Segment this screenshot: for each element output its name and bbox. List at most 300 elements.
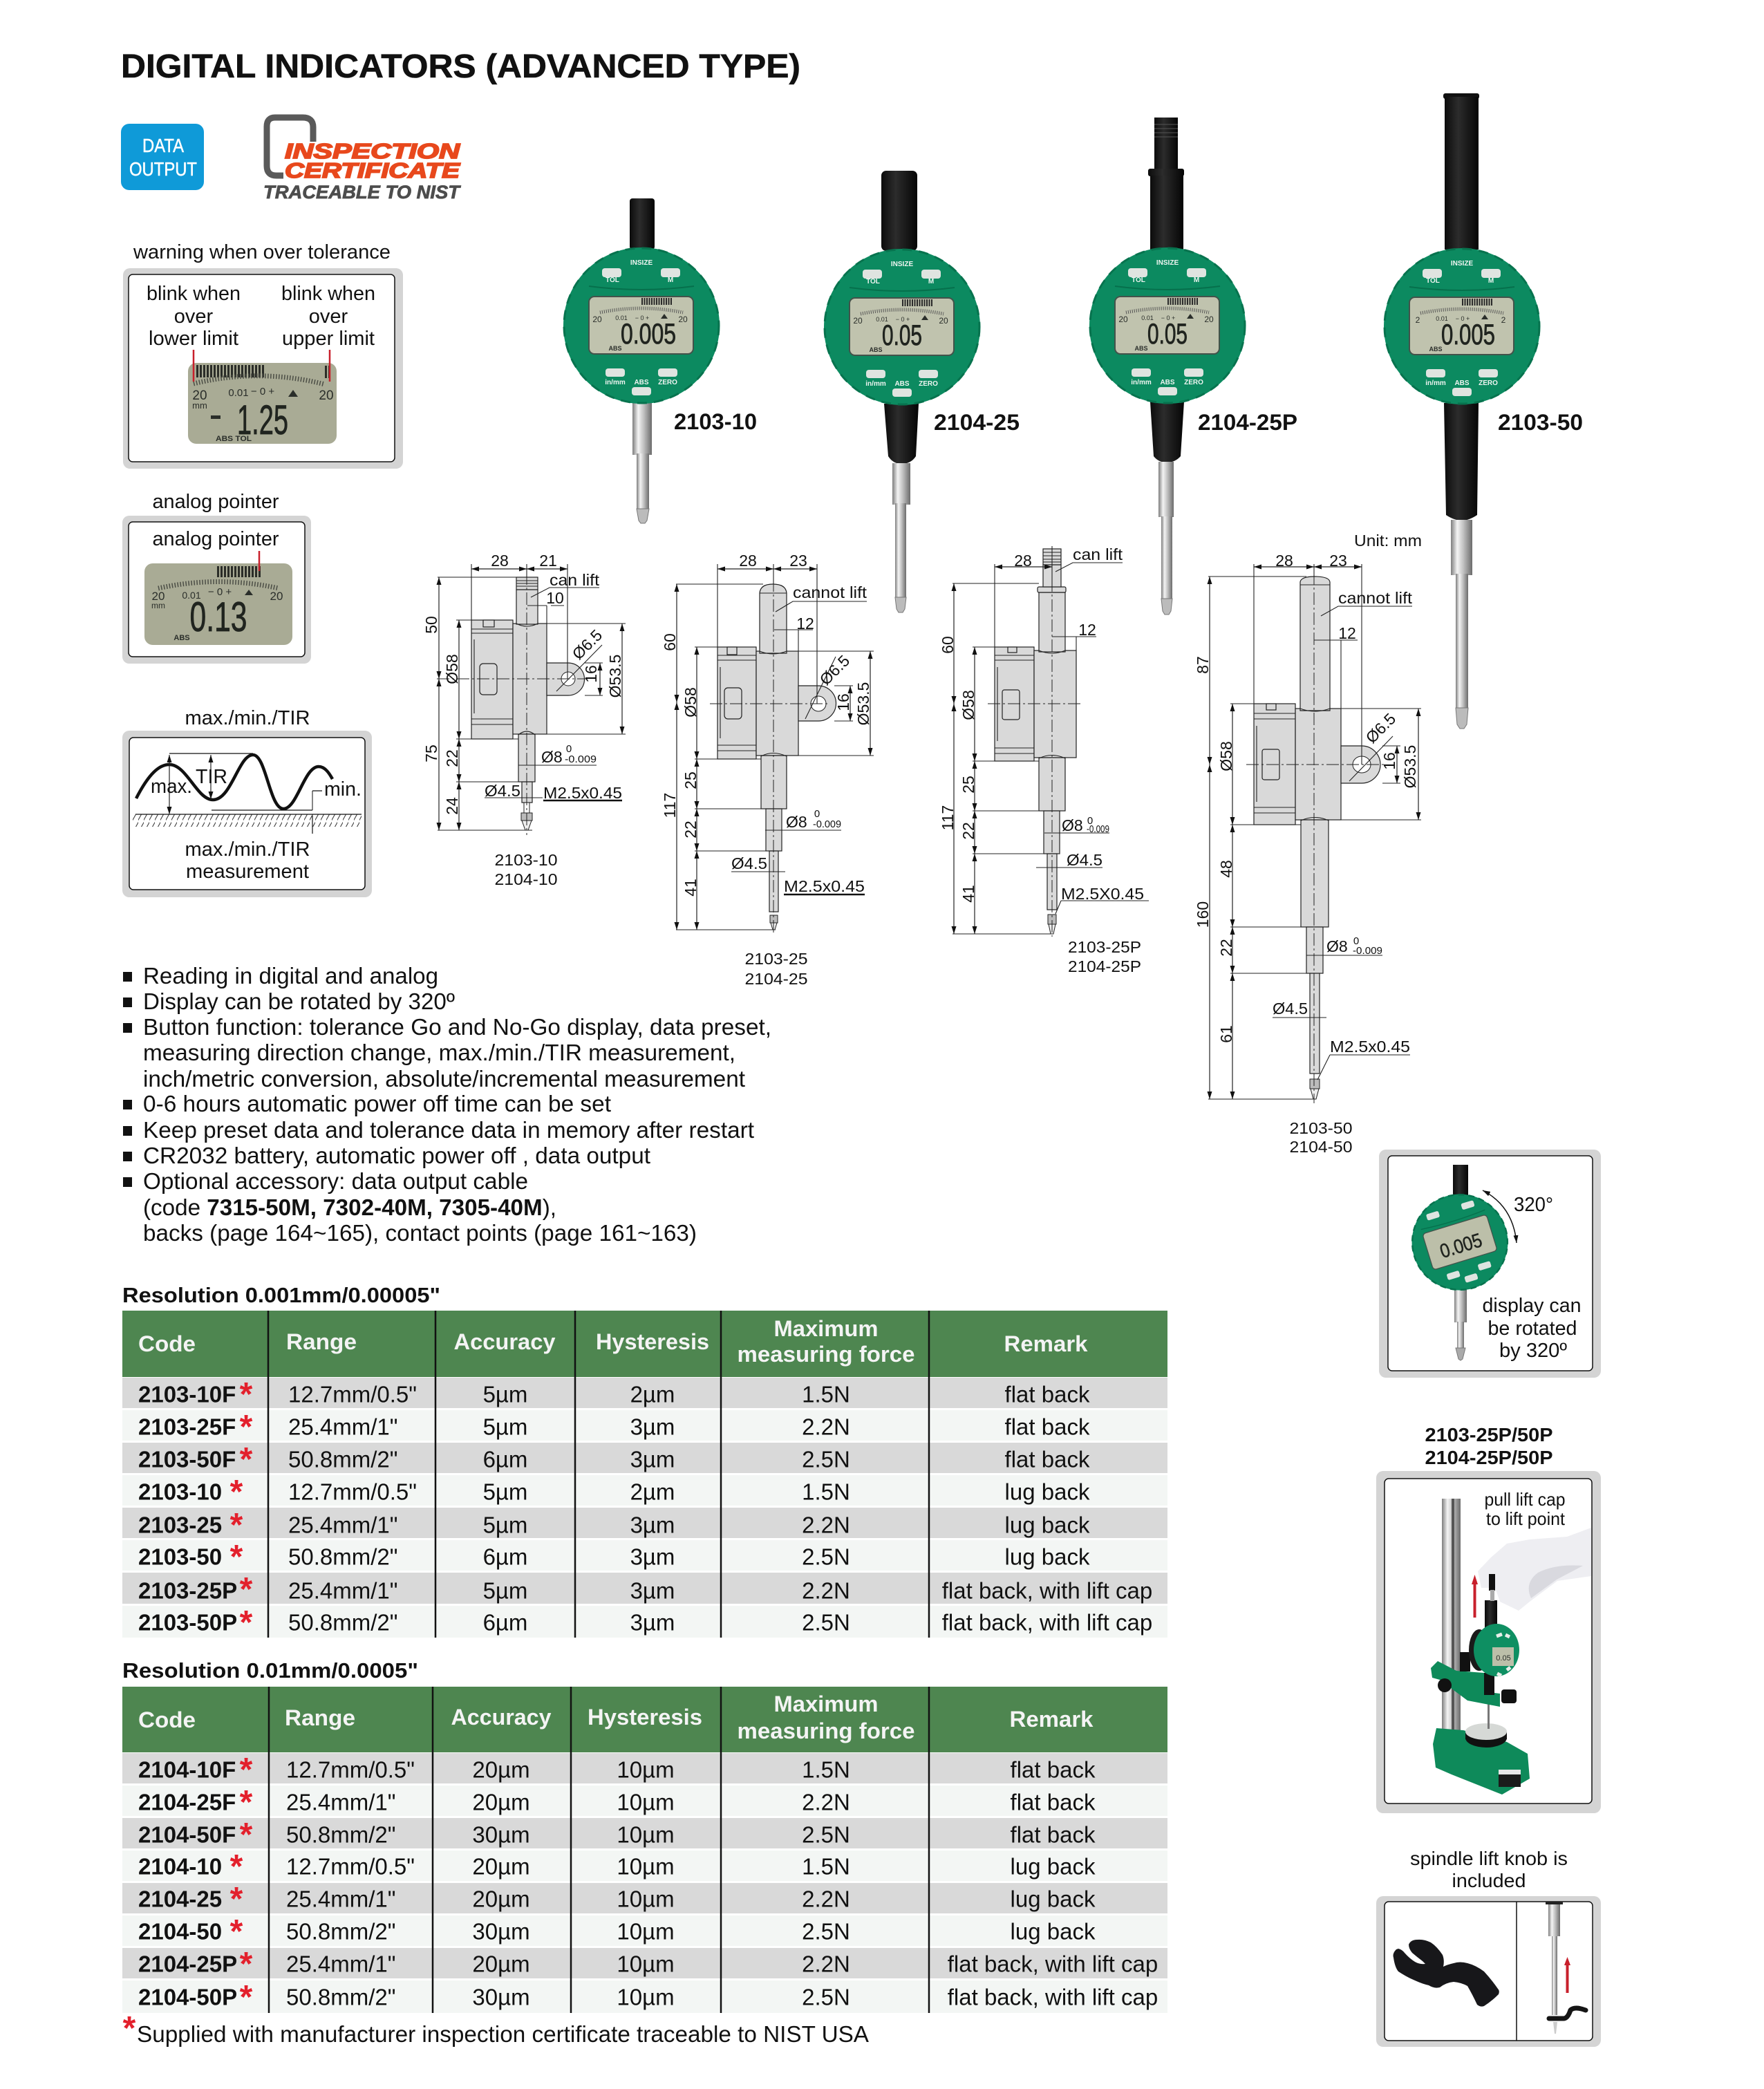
product photo: 2103-10: ABS — [634, 379, 649, 386]
table heading: resolution 0.001: Resolution 0.001mm/0.00005" — [122, 1283, 440, 1307]
text: analog pointer: analog pointer — [152, 528, 279, 550]
dimension labels: Ø53.5 — [854, 682, 872, 725]
row: 2104-50P: * — [240, 1979, 253, 2016]
dimension labels: Ø4.5 — [1067, 851, 1102, 869]
row: 2104-25: lug back — [1011, 1886, 1096, 1912]
row: 2103-10F: 2µm — [630, 1381, 675, 1407]
row: 2104-10F: 12.7mm/0.5" — [286, 1757, 415, 1782]
dimension labels: can lift — [1073, 545, 1123, 563]
row: 2104-25F — [122, 1784, 1167, 1821]
dimensions — [953, 546, 1149, 937]
product photo: 2103-10: TOL — [606, 277, 619, 284]
product photo: 2103-10: − 0 + — [635, 315, 649, 321]
dimension labels: cannot lift — [793, 583, 867, 601]
panel: analog pointer — [122, 516, 311, 664]
row: 2104-50: lug back — [1011, 1919, 1096, 1944]
icon: rotated indicator: 0.005 — [1437, 1229, 1485, 1263]
product photo: 2104-25 — [824, 171, 1020, 612]
product photo: 2104-25P: ABS — [1134, 345, 1148, 352]
dimension labels — [661, 552, 872, 897]
dimension labels: 25 — [682, 771, 700, 789]
technical drawing: 2103-25P — [939, 545, 1149, 975]
dimension labels: 50 — [422, 616, 440, 634]
heading: spindle lift knob: spindle lift knob is — [1410, 1848, 1568, 1869]
logo: inspection certificate — [263, 118, 462, 203]
body outline — [471, 577, 584, 830]
dimension labels — [939, 545, 1144, 903]
dimension labels: 0 — [814, 808, 820, 820]
panel: pull lift cap — [1376, 1471, 1601, 1813]
row: 2103-50P: 6µm — [483, 1609, 527, 1636]
row: 2104-25P: 2.2N — [802, 1951, 850, 1977]
lcd display: 0.13: 20 — [270, 590, 283, 603]
chart: measurement wave: min. — [324, 778, 362, 800]
product photo: 2103-50: ZERO — [1479, 380, 1498, 387]
row: 2103-25F: 3µm — [630, 1414, 675, 1439]
text: blink upper limit — [281, 283, 375, 350]
feature list: Display can be rotated by 320º — [143, 989, 455, 1014]
heading: lift cap models: 2103-25P/50P — [1425, 1424, 1552, 1445]
product photo: 2103-10: 20 — [592, 315, 602, 324]
row: 2103-10F: 1.5N — [802, 1381, 850, 1407]
logo: inspection certificate: INSPECTION — [285, 139, 460, 163]
product photo: 2103-10: ABS — [608, 345, 622, 352]
product photo: 2104-25P: in/mm — [1131, 379, 1152, 386]
dimension labels: 22 — [959, 822, 977, 840]
dimension labels: M2.5X0.45 — [1061, 885, 1144, 903]
heading: spindle lift knob: included — [1452, 1870, 1526, 1891]
product photo: 2103-50: 2 — [1416, 315, 1420, 325]
feature list: (code 7315-50M, 7302-40M, 7305-40M), — [143, 1195, 556, 1220]
row: 2103-10: 5µm — [483, 1479, 527, 1504]
model labels: 2103-10 — [495, 851, 557, 869]
heading: lift cap models: 2104-25P/50P — [1425, 1447, 1552, 1468]
chart: measurement wave: TIR — [196, 766, 227, 788]
row: 2104-25 — [122, 1881, 1167, 1918]
text: blink lower limit: lower limit — [149, 328, 238, 350]
dimension labels: 41 — [682, 879, 700, 897]
row: 2103-50F: 2103-50F — [138, 1446, 236, 1472]
product photo: 2104-25P: 2104-25P — [1198, 410, 1297, 435]
row: 2104-50P: 2.5N — [802, 1984, 850, 2010]
product photo: 2104-25P: − 0 + — [1161, 315, 1175, 321]
product photo: 2103-10: 0.01 — [615, 315, 628, 321]
product photo: 2104-25: ABS — [894, 380, 910, 388]
row: 2104-50F: 2104-50F — [138, 1822, 236, 1847]
dimension labels: M2.5x0.45 — [784, 877, 865, 895]
unit note: Unit: mm — [1354, 532, 1422, 550]
dimension labels: Ø53.5 — [606, 655, 624, 697]
text: display can be rotated — [1482, 1295, 1582, 1362]
row: 2104-50P — [122, 1979, 1167, 2016]
dimension labels: 28 — [491, 552, 509, 570]
dimensions — [1208, 564, 1421, 1103]
heading: warning when over tolerance: warning when over tolerance — [133, 241, 391, 263]
dimension labels: Ø6.5 — [816, 652, 853, 688]
dimension labels: 25 — [959, 776, 977, 794]
table header — [122, 1687, 1167, 1752]
text: blink lower limit — [147, 283, 241, 350]
row: 2103-50P: 2.5N — [802, 1609, 850, 1636]
product photo: 2104-25P: M — [1194, 277, 1199, 284]
product photo: 2103-10: INSIZE — [630, 259, 653, 267]
row: 2103-50P: 2103-50P — [138, 1609, 237, 1636]
dimension labels: 16 — [834, 693, 852, 711]
row: 2104-10: 20µm — [472, 1854, 530, 1879]
dimension labels: M2.5x0.45 — [1330, 1038, 1410, 1056]
dimension labels: -0.009 — [1353, 945, 1382, 957]
body outline — [995, 549, 1076, 934]
row: 2104-25: * — [230, 1881, 243, 1918]
row: 2103-25F: 25.4mm/1" — [288, 1414, 397, 1439]
text: blink upper limit: upper limit — [282, 328, 375, 350]
text: pull lift cap: to lift point — [1486, 1508, 1566, 1529]
row: 2104-50F: 30µm — [472, 1822, 530, 1847]
text: 320 degrees: 320° — [1514, 1194, 1553, 1216]
row: 2104-10F: 10µm — [617, 1757, 675, 1782]
table header: Range — [286, 1329, 357, 1354]
table header: measuring force — [737, 1718, 915, 1743]
row: 2104-50P: flat back, with lift cap — [948, 1984, 1158, 2010]
dimensions — [437, 564, 626, 835]
row: 2103-25: 25.4mm/1" — [288, 1512, 397, 1537]
row: 2104-50F: flat back — [1011, 1822, 1096, 1847]
dimension labels: cannot lift — [1338, 589, 1413, 607]
row: 2104-10: * — [230, 1848, 243, 1885]
row: 2104-25F: 25.4mm/1" — [286, 1789, 395, 1815]
product photo: 2103-50: 2 — [1501, 315, 1506, 325]
product photo: 2104-25: INSIZE — [891, 261, 913, 268]
badge: data output: DATA — [142, 135, 184, 156]
row: 2104-25F: 20µm — [472, 1789, 530, 1815]
dimension labels: Ø4.5 — [485, 782, 520, 800]
dimension labels: -0.009 — [1087, 823, 1109, 835]
row: 2104-10: lug back — [1011, 1854, 1096, 1879]
row: 2103-10F: * — [240, 1376, 253, 1413]
lcd display: -1.25: mm — [192, 400, 207, 411]
feature list: Keep preset data and tolerance data in memory after restart — [143, 1117, 754, 1143]
product photo: 2104-25: 20 — [853, 316, 863, 326]
dimension labels: -0.009 — [813, 818, 841, 830]
dimension labels: 60 — [939, 636, 957, 654]
product photo: 2104-25: 20 — [939, 316, 948, 326]
product photo: 2103-10: ZERO — [658, 379, 677, 386]
feature list: Reading in digital and analog — [143, 963, 438, 989]
table header: Remark — [1004, 1331, 1088, 1356]
heading: lift cap models — [1425, 1424, 1552, 1468]
dimension labels: Ø8 — [1062, 816, 1083, 834]
arrow: red lift arrow — [1564, 1957, 1570, 1993]
row: 2103-50P: 50.8mm/2" — [288, 1609, 397, 1636]
product photo: 2103-10: M — [668, 277, 673, 284]
row: 2104-50P: 30µm — [472, 1984, 530, 2010]
row: 2103-25P — [122, 1571, 1167, 1608]
text: pull lift cap — [1485, 1489, 1566, 1529]
row: 2104-50: 2104-50 — [138, 1919, 222, 1944]
table header: Code — [138, 1331, 196, 1356]
dimension labels: 75 — [422, 744, 440, 762]
row: 2103-50F: 3µm — [630, 1446, 675, 1472]
row: 2104-25F: flat back — [1011, 1789, 1096, 1815]
model labels: 2104-10 — [495, 870, 557, 888]
row: 2104-25: 2104-25 — [138, 1886, 222, 1912]
row: 2104-10F — [122, 1752, 1167, 1788]
dimension labels: 22 — [682, 821, 700, 839]
table header: Maximum — [774, 1316, 878, 1341]
footnote: Supplied with manufacturer inspection certificate traceable to NIST USA — [137, 2021, 869, 2047]
row: 2104-25P: 20µm — [472, 1951, 530, 1977]
product photo: 2104-25P: 20 — [1204, 315, 1214, 324]
dimension labels: 12 — [1078, 621, 1096, 639]
product photo: 2103-50: ABS — [1429, 346, 1443, 353]
row: 2104-25P: 2104-25P — [138, 1951, 237, 1977]
model labels: 2104-25 — [745, 970, 807, 988]
row: 2104-50: 10µm — [617, 1919, 675, 1944]
product photo: 2104-25P: ABS — [1160, 379, 1175, 386]
table header: Hysteresis — [596, 1329, 709, 1354]
row: 2103-25F — [122, 1409, 1167, 1445]
panel: spindle lift knob — [1376, 1896, 1601, 2047]
technical drawing: 2103-10 — [422, 552, 626, 888]
product photo: 2103-10: 0.005 — [621, 317, 676, 350]
dimension labels: 23 — [789, 552, 807, 570]
row: 2103-50: 3µm — [630, 1544, 675, 1569]
arrow: rotation arc — [1483, 1190, 1517, 1243]
arrow: red lift arrow — [1472, 1575, 1478, 1618]
dimension labels: Ø8 — [1326, 937, 1348, 955]
chart: measurement wave — [133, 753, 362, 834]
dimension labels: 87 — [1194, 656, 1212, 674]
row: 2104-50F: 10µm — [617, 1822, 675, 1847]
model labels — [1068, 938, 1141, 975]
text: blink lower limit: blink when — [147, 283, 241, 305]
row: 2103-10: * — [230, 1474, 243, 1510]
footnote: * — [123, 2010, 136, 2047]
lcd display: 0.13: − 0 + — [208, 586, 232, 598]
dimension labels: Ø8 — [786, 813, 807, 831]
row: 2103-25: 2.2N — [802, 1512, 850, 1537]
logo: inspection certificate: TRACEABLE TO NIST — [263, 182, 462, 203]
row: 2103-25F: 2103-25F — [138, 1414, 236, 1439]
dimension labels: 21 — [539, 552, 557, 570]
product photo: 2103-50 — [1384, 93, 1583, 729]
dimension labels: 22 — [443, 749, 461, 767]
text: blink upper limit: over — [309, 306, 348, 328]
row: 2104-25P: flat back, with lift cap — [948, 1951, 1158, 1977]
row: 2104-25: 20µm — [472, 1886, 530, 1912]
row: 2104-25P — [122, 1946, 1167, 1983]
lcd display: -1.25: ABS TOL — [216, 435, 252, 443]
dimension labels: 0 — [1353, 935, 1359, 947]
row: 2104-25F: 2104-25F — [138, 1789, 236, 1815]
lcd display: -1.25: 20 — [319, 388, 334, 403]
table heading: resolution 0.01: Resolution 0.01mm/0.0005" — [122, 1658, 418, 1683]
product photo: 2104-25: 0.05 — [882, 319, 922, 351]
dimension labels: 61 — [1217, 1025, 1235, 1043]
row: 2103-25F: flat back — [1005, 1414, 1090, 1439]
row: 2103-50P — [122, 1604, 1167, 1641]
row: 2104-10F: 1.5N — [802, 1757, 850, 1782]
dimension labels: 12 — [1338, 624, 1356, 642]
footnote — [123, 2010, 869, 2047]
dimension labels — [1194, 552, 1419, 1056]
lcd display: -1.25: 0.01 — [228, 387, 249, 399]
dimension labels: Ø58 — [682, 687, 700, 718]
model labels: 2104-25P — [1068, 957, 1141, 975]
dimension labels: 0 — [1087, 815, 1093, 827]
icon: lift knob — [1394, 1940, 1499, 2007]
row: 2103-25F: 5µm — [483, 1414, 527, 1439]
dimension labels: Ø4.5 — [731, 854, 767, 872]
product photo: 2104-25: 2104-25 — [934, 410, 1020, 435]
row: 2104-25P: * — [240, 1946, 253, 1983]
dimension labels: Ø6.5 — [1362, 710, 1399, 747]
row: 2104-50F: * — [240, 1817, 253, 1853]
row: 2104-25F: * — [240, 1784, 253, 1821]
product photo: 2104-25P: TOL — [1132, 277, 1145, 284]
dimension labels: Ø53.5 — [1401, 745, 1419, 788]
model labels: 2103-25 — [745, 950, 807, 968]
dimension labels: 12 — [796, 615, 814, 633]
row: 2104-25F: 10µm — [617, 1789, 675, 1815]
caption: measurement: max./min./TIR — [185, 839, 310, 861]
icon: spindle with knob — [1546, 1902, 1586, 2034]
lcd display: 0.13: 20 — [152, 590, 165, 603]
row: 2104-50P: 50.8mm/2" — [286, 1984, 395, 2010]
row: 2103-25F: * — [240, 1409, 253, 1445]
table header: Range — [285, 1705, 355, 1730]
dimensions — [676, 564, 874, 933]
product photo: 2104-25: M — [928, 278, 934, 285]
dimension labels: 24 — [443, 797, 461, 815]
row: 2103-50: 50.8mm/2" — [288, 1544, 397, 1569]
title: DIGITAL INDICATORS (ADVANCED TYPE) — [121, 48, 800, 85]
logo: inspection certificate: CERTIFICATE — [285, 158, 461, 182]
product photo: 2104-25: TOL — [866, 278, 880, 285]
product photo: 2103-10 — [563, 198, 757, 523]
product photo: 2103-50: INSIZE — [1451, 260, 1473, 268]
heading: max/min/TIR: max./min./TIR — [185, 707, 310, 729]
row: 2103-25P: flat back, with lift cap — [942, 1577, 1152, 1604]
product photo: 2104-25P: 20 — [1118, 315, 1128, 324]
product photo: 2103-10: in/mm — [605, 379, 626, 386]
dimension labels: 16 — [582, 665, 600, 683]
row: 2104-10 — [122, 1848, 1167, 1885]
model labels — [1290, 1119, 1352, 1156]
product photo: 2104-25P — [1089, 118, 1297, 615]
feature list: Button function: tolerance Go and No-Go display, data preset, — [143, 1014, 771, 1040]
row: 2103-10F — [122, 1376, 1167, 1413]
row: 2104-50: 50.8mm/2" — [286, 1919, 395, 1944]
row: 2103-10F: flat back — [1005, 1381, 1090, 1407]
lcd display: -1.25: − 0 + — [251, 386, 274, 397]
body outline — [1254, 577, 1380, 1099]
dimension labels: 23 — [1329, 552, 1347, 570]
product photo: 2103-50: − 0 + — [1456, 315, 1470, 322]
body outline — [717, 584, 836, 930]
caption: measurement — [185, 839, 310, 883]
product photo: 2103-50: TOL — [1426, 277, 1440, 285]
heading: analog pointer: analog pointer — [152, 491, 279, 513]
dimension labels: Ø58 — [1217, 741, 1235, 771]
icon: rotated indicator — [1400, 1165, 1520, 1360]
row: 2103-50: 2.5N — [802, 1544, 850, 1569]
caption: measurement: measurement — [186, 861, 309, 883]
product photo: 2104-25P: 0.01 — [1141, 315, 1154, 321]
dimension labels: 10 — [546, 589, 564, 607]
table header: measuring force — [737, 1342, 915, 1367]
dimension labels: M2.5x0.45 — [543, 784, 622, 802]
lcd display: -1.25: 20 — [192, 388, 207, 403]
text: pull lift cap: pull lift cap — [1485, 1489, 1565, 1510]
row: 2103-25F: 2.2N — [802, 1414, 850, 1439]
table header: Accuracy — [451, 1705, 552, 1730]
lcd display: 0.13: 0.01 — [182, 590, 201, 601]
feature list: inch/metric conversion, absolute/incremental measurement — [143, 1066, 745, 1092]
feature list — [123, 963, 771, 1246]
row: 2103-10F: 12.7mm/0.5" — [288, 1381, 417, 1407]
feature list: CR2032 battery, automatic power off , data output — [143, 1143, 650, 1168]
table header — [122, 1311, 1167, 1377]
product photo: 2104-25: ZERO — [919, 380, 938, 388]
badge: data output — [121, 124, 204, 190]
row: 2103-25: lug back — [1005, 1512, 1090, 1537]
row: 2104-50 — [122, 1913, 1167, 1950]
row: 2104-25: 25.4mm/1" — [286, 1886, 395, 1912]
row: 2104-50: 30µm — [472, 1919, 530, 1944]
heading: spindle lift knob — [1410, 1848, 1568, 1891]
product photo: 2104-25: − 0 + — [896, 316, 910, 323]
model labels: 2103-25P — [1068, 938, 1141, 956]
dimension labels: Ø4.5 — [1273, 1000, 1308, 1018]
row: 2104-50F: 50.8mm/2" — [286, 1822, 395, 1847]
dimension labels: 28 — [1014, 552, 1032, 570]
row: 2104-50F — [122, 1817, 1167, 1853]
product photo: 2104-25P: 0.05 — [1147, 317, 1188, 350]
text: display can be rotated: be rotated — [1488, 1318, 1577, 1340]
dimension labels: Ø58 — [959, 690, 977, 720]
technical drawing: 2103-50 — [1194, 552, 1421, 1156]
lcd display: 0.13: mm — [151, 601, 165, 610]
dimension labels: 117 — [939, 805, 957, 830]
row: 2104-10F: 20µm — [472, 1757, 530, 1782]
lcd display: 0.13 — [144, 563, 292, 645]
dimension labels: Ø58 — [443, 654, 461, 684]
row: 2104-10: 10µm — [617, 1854, 675, 1879]
badge: data output: OUTPUT — [129, 158, 197, 180]
row: 2103-50F: * — [240, 1441, 253, 1478]
row: 2103-25P: 2103-25P — [138, 1577, 237, 1604]
product photo: 2103-10: 2103-10 — [674, 409, 757, 434]
row: 2104-25: 10µm — [617, 1886, 675, 1912]
feature list: 0-6 hours automatic power off time can be set — [143, 1091, 611, 1116]
row: 2103-25P: 25.4mm/1" — [288, 1577, 397, 1604]
row: 2103-50: 6µm — [483, 1544, 527, 1569]
row: 2103-25: 5µm — [483, 1512, 527, 1537]
row: 2104-25P: 25.4mm/1" — [286, 1951, 395, 1977]
text: display can be rotated: display can — [1482, 1295, 1582, 1317]
row: 2104-50: * — [230, 1913, 243, 1950]
row: 2104-50P: 2104-50P — [138, 1984, 237, 2010]
product photo: 2103-10: 20 — [678, 315, 688, 324]
row: 2103-50F: 2.5N — [802, 1446, 850, 1472]
row: 2103-10: lug back — [1005, 1479, 1090, 1504]
row: 2104-10F: * — [240, 1752, 253, 1788]
table header: Maximum — [774, 1692, 878, 1716]
row: 2103-50F: flat back — [1005, 1446, 1090, 1472]
row: 2103-10: 1.5N — [802, 1479, 850, 1504]
row: 2104-50F: 2.5N — [802, 1822, 850, 1847]
